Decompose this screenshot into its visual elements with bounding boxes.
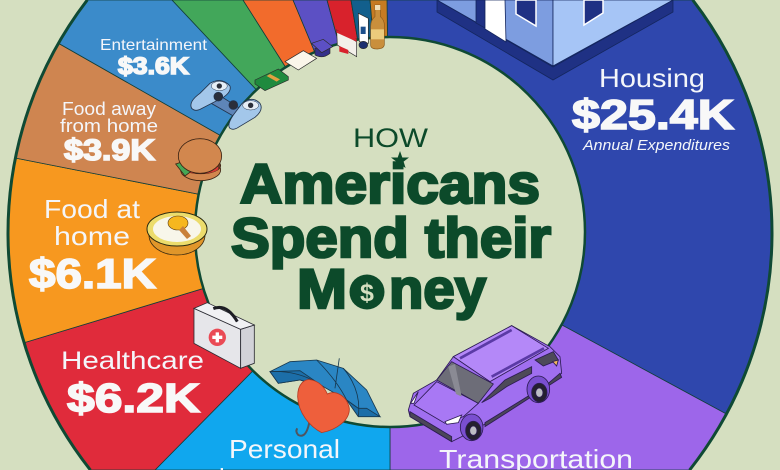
icon: burger [176, 139, 222, 181]
label: food at home [29, 194, 156, 297]
label: food away from home: Food away [62, 99, 156, 119]
icon: plate of food [147, 212, 207, 255]
label: housing: $25.4K [572, 91, 734, 138]
label: healthcare [61, 347, 204, 421]
segment: red category [327, 0, 390, 232]
icon: first aid kit [194, 303, 254, 368]
icons: cash bundle, card, cap, box, tube, bottle [255, 5, 384, 91]
segment: green category [172, 0, 390, 232]
segment: transportation [390, 232, 780, 470]
icon: bottle [371, 5, 384, 49]
title: spend their: Spend their [231, 206, 551, 269]
title: money: $ [360, 279, 374, 307]
segment: food away from home [0, 10, 390, 232]
title: money: M [297, 257, 347, 320]
label: entertainment: $3.6K [118, 53, 190, 80]
label: housing: Annual Expenditures [582, 138, 730, 154]
outer ring left arc [8, 0, 90, 470]
segment: personal insurance [155, 232, 390, 470]
icon: cash [255, 69, 288, 91]
label: food away from home: from home [60, 116, 158, 136]
label: healthcare: Healthcare [61, 347, 204, 375]
title: how: HOW [353, 123, 429, 153]
title: money [297, 257, 486, 320]
segment: healthcare [0, 232, 390, 470]
icon: star [391, 151, 409, 168]
label: personal insurance: Personal [229, 434, 340, 464]
label: food at home: Food at [44, 194, 141, 224]
title [231, 123, 551, 320]
segment: teal category [351, 0, 390, 232]
outer ring right arc [690, 0, 772, 470]
label: housing [572, 63, 734, 154]
icon: house [437, 0, 673, 80]
segment: entertainment [0, 0, 390, 232]
segment: food at home [0, 155, 390, 350]
title: americans: Americans [240, 152, 540, 215]
icon: game controller [191, 81, 261, 129]
label: healthcare: $6.2K [67, 375, 200, 421]
label: housing: Housing [599, 63, 705, 93]
label: entertainment [100, 37, 208, 80]
label: food away from home [60, 99, 158, 167]
segment: brown category [370, 0, 390, 232]
centre circle [195, 37, 585, 427]
label: food at home: $6.1K [29, 250, 156, 297]
label: food away from home: $3.9K [64, 134, 155, 167]
label: food at home: home [54, 221, 130, 251]
icon: tube [358, 13, 368, 49]
label: entertainment: Entertainment [100, 37, 208, 54]
segment: violet category [293, 0, 390, 232]
title: money: ney [389, 257, 486, 320]
icon: umbrella and heart [270, 358, 380, 436]
icon: card [285, 51, 317, 70]
icon: box [337, 30, 357, 57]
icon: car [408, 326, 562, 442]
segment: orange category [243, 0, 390, 232]
icon: graduation cap [312, 39, 333, 57]
segment: housing [387, 0, 780, 443]
